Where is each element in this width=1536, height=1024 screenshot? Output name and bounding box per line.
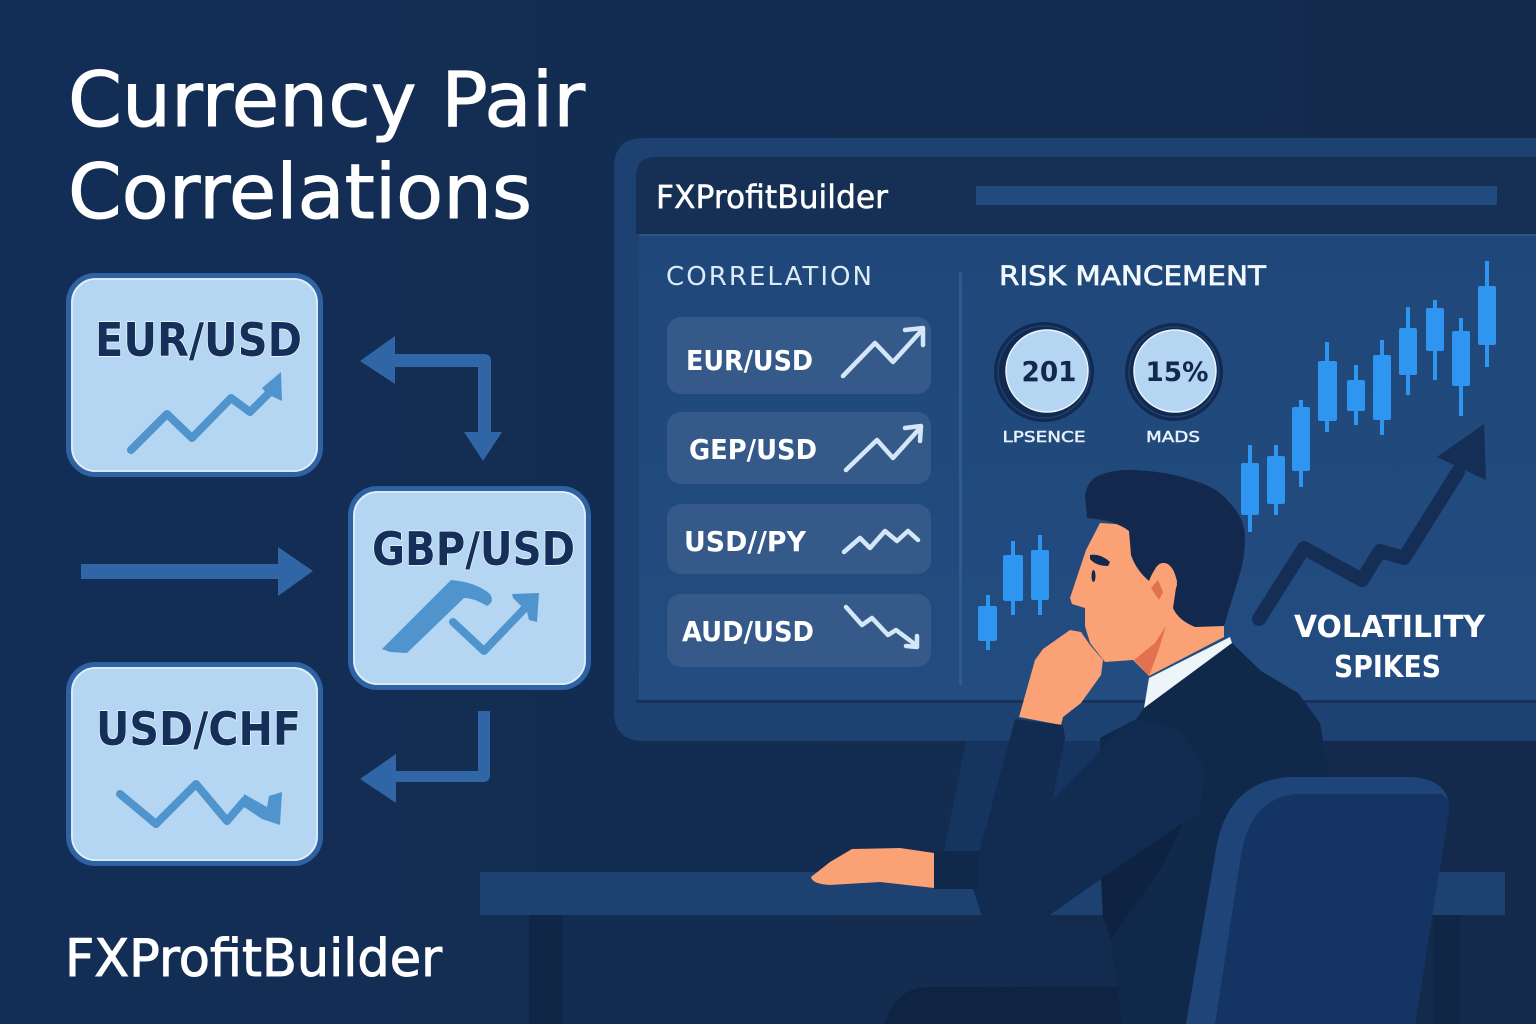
gauge: 201: LPSENCE	[1002, 428, 1086, 446]
row: AUD/USD: AUD/USD	[682, 615, 814, 648]
brand footer: FXProfitBuilder	[65, 929, 443, 989]
row: EUR/USD	[667, 317, 931, 394]
row: GEP/USD	[667, 412, 931, 484]
monitor	[614, 138, 1536, 741]
row: GEP/USD: GEP/USD	[689, 433, 817, 466]
volatility spikes label	[1294, 610, 1486, 685]
row: USD//PY: USD//PY	[684, 525, 807, 558]
monitor screen	[636, 234, 1536, 703]
gauge: 15%: 15%	[1146, 357, 1208, 388]
face and neck	[1070, 523, 1224, 676]
row: EUR/USD: EUR/USD	[686, 344, 813, 377]
row: USD//PY	[667, 504, 931, 574]
gauge: 15%	[1125, 323, 1223, 446]
row: AUD/USD	[667, 594, 931, 667]
trader figure	[811, 470, 1335, 1024]
hand on chin	[1019, 630, 1103, 725]
gauge: 201	[994, 322, 1094, 446]
card: EUR/USD	[68, 276, 320, 474]
risk panel heading: RISK MANCEMENT	[999, 261, 1267, 292]
title: Correlations	[68, 147, 532, 236]
card: EUR/USD: EUR/USD	[95, 313, 302, 367]
chart: GBP/USD boomerang trend	[382, 580, 539, 653]
raised arm sleeve	[971, 719, 1205, 926]
card: USD/CHF	[68, 664, 320, 864]
monitor header bar: FXProfitBuilder	[656, 178, 889, 216]
hair	[1085, 470, 1245, 627]
monitor stand	[940, 740, 1120, 872]
monitor header bar	[636, 157, 1536, 234]
arrow: into GBP/USD	[81, 547, 313, 596]
title: Currency Pair	[68, 55, 586, 144]
volatility spikes label: SPIKES	[1334, 650, 1441, 685]
chart: USD/CHF choppy trend	[120, 784, 282, 825]
office chair	[1186, 777, 1449, 1024]
card: GBP/USD: GBP/USD	[372, 522, 575, 576]
card: USD/CHF: USD/CHF	[96, 702, 301, 756]
resting hand	[811, 848, 979, 889]
arrow: GBP/USD to USD/CHF	[360, 711, 490, 803]
neck shadow	[1134, 626, 1166, 676]
candlestick chart	[978, 261, 1496, 650]
desk	[480, 872, 1505, 1024]
arrow: EUR/USD to GBP/USD	[360, 336, 502, 461]
suit body	[1100, 643, 1335, 1024]
sleeve shadow	[1101, 822, 1184, 939]
gauge: 201: 201	[1022, 355, 1076, 388]
ear	[1151, 563, 1177, 603]
card: GBP/USD	[350, 488, 588, 688]
title	[68, 55, 586, 236]
volatility spikes label: VOLATILITY	[1294, 610, 1486, 645]
chart: EUR/USD up trend	[131, 372, 282, 450]
eye and brow	[1090, 555, 1110, 582]
shirt collar	[1144, 637, 1232, 708]
rising trend arrow	[1259, 424, 1486, 619]
gauge: 15%: MADS	[1146, 428, 1200, 446]
correlation panel heading: CORRELATION	[666, 262, 872, 292]
